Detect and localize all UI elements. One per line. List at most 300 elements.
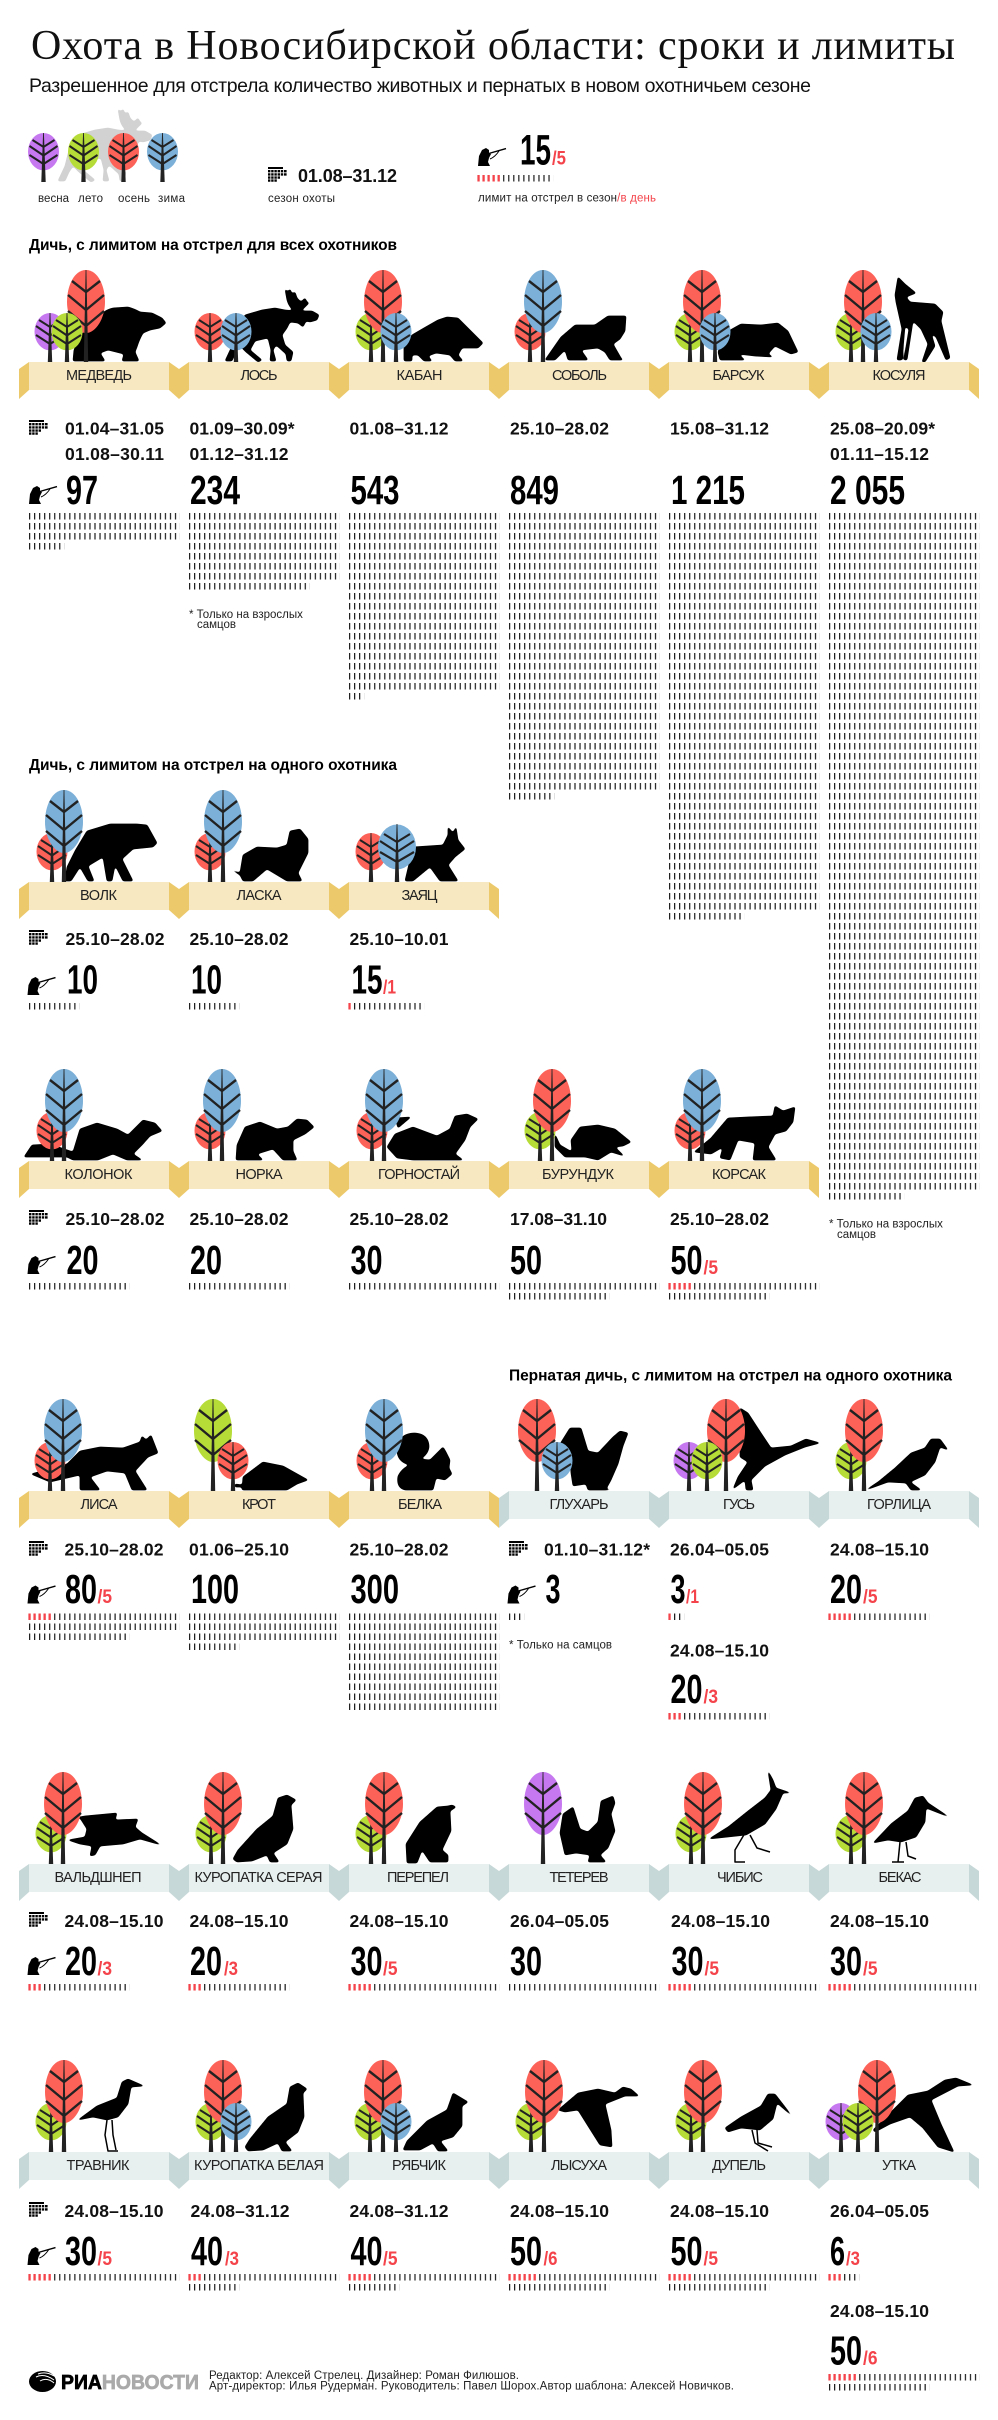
- ribbon: [819, 1864, 979, 1901]
- ribbon: ГЛУХАРЬ: [550, 1497, 608, 1513]
- ribbon: [339, 1491, 499, 1528]
- ribbon: БАРСУК: [712, 368, 765, 384]
- limit: 80: [65, 1566, 97, 1612]
- dates: 24.08–15.10: [64, 2201, 164, 2221]
- limit: 97: [66, 467, 98, 513]
- limit: 234: [190, 467, 240, 513]
- dates: [65, 418, 164, 464]
- legend date: 01.08–31.12: [298, 166, 397, 186]
- dates: 24.08–15.10: [350, 1911, 449, 1931]
- ribbon: [659, 1161, 819, 1198]
- icon: hunter: [28, 2247, 56, 2265]
- icon: mink: [236, 1119, 314, 1160]
- footnote: [189, 609, 303, 631]
- icon: hunter: [508, 1586, 536, 1604]
- ribbon: НОРКА: [236, 1167, 283, 1183]
- icon: calendar: [29, 1541, 48, 1556]
- icon: willow ptarmigan: [245, 2083, 307, 2151]
- panel: Корсак: [659, 1069, 820, 1300]
- legend caption: лимит на отстрел в сезон/в день: [478, 192, 656, 204]
- panel: Норка: [179, 1069, 339, 1290]
- icon: hare: [405, 827, 465, 881]
- ribbon: ЛИСА: [80, 1497, 118, 1513]
- ribbon: ЛАСКА: [236, 888, 282, 904]
- ticks: [349, 1614, 500, 1714]
- limit: 50: [510, 2228, 542, 2274]
- ticks: [508, 2274, 660, 2291]
- logo wordmark: РИАНОВОСТИ: [61, 2372, 199, 2394]
- ticks: [509, 513, 660, 803]
- dates: 25.10–28.02: [350, 1209, 449, 1229]
- legend: seasons: [28, 109, 186, 205]
- ribbon: ПЕРЕПЕЛ: [387, 1870, 449, 1886]
- ribbon: [499, 2152, 659, 2189]
- limit spring: 6: [830, 2228, 845, 2274]
- limit spring: /1: [686, 1587, 699, 1608]
- limit: 15: [352, 956, 382, 1002]
- limit: 30: [510, 1938, 542, 1984]
- limit: 10: [67, 956, 98, 1002]
- trees: [516, 2060, 563, 2152]
- limit autumn: 20: [670, 1666, 702, 1712]
- panel: Рябчик: [339, 2060, 500, 2291]
- dates: 25.10–28.02: [190, 929, 289, 949]
- legend: shot limit: [477, 126, 656, 204]
- limit: 543: [350, 467, 400, 513]
- panel: Травник: [19, 2060, 180, 2281]
- limit: 20: [65, 1938, 97, 1984]
- dates: 24.08–15.10: [830, 1911, 929, 1931]
- panel: Утка: [819, 2060, 980, 2391]
- ribbon: ЧИБИС: [717, 1870, 763, 1886]
- panel: Тетерев: [499, 1772, 660, 1991]
- trees: [356, 824, 416, 882]
- trees: [196, 1772, 242, 1864]
- logo: РИА Новости: [29, 2371, 199, 2394]
- trees: [826, 2060, 896, 2152]
- credits: [209, 2370, 734, 2392]
- ticks: [189, 1003, 239, 1010]
- limit: /5: [98, 2249, 112, 2270]
- ribbon: УТКА: [882, 2158, 916, 2174]
- trees: [194, 313, 252, 362]
- trees: [356, 1069, 403, 1161]
- legend season labels: [38, 193, 186, 205]
- ribbon: КОЛОНОК: [64, 1167, 133, 1183]
- ribbon: [499, 1864, 659, 1901]
- dates: 01.06–25.10: [189, 1540, 289, 1560]
- trees: [836, 1772, 883, 1864]
- icon: woodcock: [63, 1813, 161, 1856]
- legend number: 15: [520, 126, 551, 174]
- trees: [34, 270, 105, 362]
- ribbon: [179, 1161, 339, 1198]
- ribbon: [19, 2152, 179, 2189]
- ticks: [188, 1984, 290, 1991]
- credits: Редактор: Алексей Стрелец. Дизайнер: Роман Филюшов.: [209, 2370, 519, 2382]
- limit: /3: [224, 1959, 238, 1980]
- trees: [836, 270, 892, 362]
- limit: 1 215: [671, 467, 745, 513]
- icon: badger: [718, 323, 798, 360]
- icon: calendar: [509, 1541, 528, 1556]
- icon: coot: [558, 2087, 639, 2147]
- legend ticks: [477, 175, 554, 182]
- panel: Глухарь: [499, 1399, 659, 1652]
- ribbon: ЛЫСУХА: [551, 2158, 607, 2174]
- ticks: [189, 513, 340, 593]
- limit: /5: [704, 2249, 718, 2270]
- limit: /5: [704, 1959, 719, 1980]
- limit: 3: [546, 1566, 560, 1612]
- dates: 25.10–28.02: [66, 929, 165, 949]
- limit: 20: [66, 1237, 98, 1283]
- dates spring: 26.04–05.05: [670, 1540, 769, 1560]
- dates: 01.10–31.12*: [544, 1540, 650, 1560]
- ticks: [29, 513, 180, 553]
- icon: boar: [404, 317, 483, 361]
- dates: 01.11–15.12: [830, 444, 929, 464]
- limit: 30: [830, 1938, 862, 1984]
- panel: Заяц: [339, 824, 499, 1010]
- ticks spring: [828, 2274, 859, 2281]
- dates: 01.08–30.11: [65, 444, 164, 464]
- dates: 01.04–31.05: [65, 418, 164, 438]
- icon: calendar: [29, 1912, 48, 1927]
- dates: 25.10–28.02: [670, 1209, 769, 1229]
- panel: Лиса: [19, 1399, 180, 1640]
- icon: grey moose behind trees: [58, 109, 152, 182]
- ticks: [348, 2274, 500, 2291]
- trees: [196, 2060, 252, 2152]
- panel: Волк: [19, 790, 179, 1010]
- dates: 24.08–15.10: [830, 1540, 929, 1560]
- dates: 01.09–30.09*: [190, 418, 295, 438]
- trees: [676, 1772, 722, 1864]
- icon: goose: [733, 1408, 820, 1490]
- ribbon: [499, 362, 659, 399]
- icon: wolf: [65, 824, 157, 881]
- ticks: [28, 2274, 180, 2281]
- trees: [674, 1399, 745, 1491]
- panel: Колонок: [19, 1069, 179, 1290]
- icon: calendar: [29, 2202, 48, 2217]
- limit: /1: [383, 978, 396, 998]
- trees: [674, 1069, 721, 1161]
- icon: quail: [406, 1805, 456, 1863]
- ribbon: ТРАВНИК: [66, 2158, 130, 2174]
- dates: 25.10–10.01: [350, 929, 449, 949]
- ticks: [29, 1003, 79, 1010]
- ticks: [828, 1984, 980, 1991]
- ribbon: [659, 2152, 819, 2189]
- limit: 2 055: [830, 467, 905, 513]
- limit: 300: [350, 1566, 399, 1612]
- trees: [674, 270, 730, 362]
- limit: 30: [350, 1237, 382, 1283]
- legend number: /5: [552, 148, 566, 170]
- ribbon: [19, 1491, 179, 1528]
- ticks: [509, 1984, 660, 1991]
- trees: [676, 2060, 722, 2152]
- legend: hunting season: [268, 166, 397, 205]
- ticks: [188, 2274, 340, 2291]
- limit: 20: [830, 1566, 862, 1612]
- subtitle: Разрешенное для отстрела количество животных и пернатых в новом охотничьем сезоне: [29, 75, 811, 97]
- dates: 24.08–15.10: [64, 1911, 164, 1931]
- ribbon: БЕКАС: [878, 1870, 922, 1886]
- panel: Бекас: [819, 1772, 980, 1991]
- trees: [194, 1399, 248, 1491]
- trees: [36, 1069, 83, 1161]
- limit: /3: [98, 1959, 112, 1980]
- icon: corsac fox: [694, 1106, 795, 1160]
- icon: calendar: [268, 167, 287, 182]
- legend season labels: зима: [158, 193, 186, 205]
- icon: duck: [873, 2078, 973, 2152]
- icon: black grouse: [560, 1796, 615, 1862]
- panel: Куропатка серая: [179, 1772, 339, 1991]
- icon: kolonok: [24, 1120, 162, 1160]
- panel: Кабан: [339, 270, 500, 703]
- ribbon: [179, 1864, 339, 1901]
- ribbon: РЯБЧИК: [392, 2158, 447, 2174]
- footnote: самцов: [837, 1229, 876, 1241]
- legend season labels: весна: [38, 193, 70, 205]
- trees: [356, 1772, 403, 1864]
- icon: hazel grouse: [403, 2093, 468, 2151]
- limit spring: 3: [670, 1566, 686, 1612]
- ribbon: [179, 882, 339, 919]
- panel: Соболь: [499, 270, 660, 803]
- dates: 15.08–31.12: [670, 418, 769, 438]
- ribbon: КОСУЛЯ: [872, 368, 926, 384]
- icon: hunter: [28, 1256, 56, 1274]
- limit: /5: [98, 1587, 112, 1608]
- ribbon: КРОТ: [242, 1497, 276, 1513]
- ribbon: [819, 362, 979, 399]
- limit spring: /3: [846, 2249, 860, 2270]
- ribbon: [179, 362, 339, 399]
- ticks: [668, 1984, 820, 1991]
- ribbon: ГОРНОСТАЙ: [378, 1165, 460, 1183]
- ticks: [28, 1614, 180, 1640]
- ribbon: ВАЛЬДШНЕП: [54, 1870, 142, 1886]
- icon: calendar: [29, 420, 48, 435]
- limit: /5: [704, 1258, 718, 1279]
- panel: Медведь: [19, 270, 180, 553]
- heading: game with limit per hunter: Дичь, с лимитом на отстрел на одного охотника: [29, 757, 397, 774]
- dates: 24.08–15.10: [671, 1911, 770, 1931]
- ribbon: [339, 882, 499, 919]
- ticks: [348, 1984, 500, 1991]
- panel: Лысуха: [499, 2060, 660, 2291]
- limit: /5: [863, 1959, 878, 1980]
- ribbon: [819, 1491, 979, 1528]
- icon: fox: [31, 1435, 158, 1490]
- ribbon: [19, 1864, 179, 1901]
- ribbon: [339, 1161, 499, 1198]
- limit autumn: /6: [863, 2348, 878, 2370]
- limit: 100: [191, 1566, 239, 1612]
- ticks autumn: [668, 1713, 770, 1720]
- dates autumn: 24.08–15.10: [830, 2301, 929, 2321]
- icon: hunter: [28, 1957, 56, 1975]
- ribbon: [659, 362, 819, 399]
- dates: 25.08–20.09*: [830, 418, 935, 438]
- ticks: [349, 513, 500, 703]
- legend season labels: лето: [78, 193, 103, 205]
- heading: game with limit for all hunters: Дичь, с лимитом на отстрел для всех охотников: [29, 237, 397, 254]
- icon: roe deer: [895, 277, 950, 362]
- panel: Лось: [179, 289, 340, 631]
- legend trees: [28, 133, 178, 182]
- ribbon: [19, 1161, 179, 1198]
- ribbon: БЕЛКА: [398, 1497, 442, 1513]
- icon: lapwing: [709, 1771, 791, 1862]
- limit: /6: [544, 2249, 558, 2270]
- footnote: [829, 1218, 943, 1241]
- icon: turtle dove: [866, 1439, 948, 1490]
- ribbon: [19, 362, 179, 399]
- ribbon: ГОРЛИЦА: [867, 1497, 931, 1513]
- icon: snipe: [873, 1796, 949, 1862]
- icon: globe: [29, 2371, 56, 2392]
- icon: chipmunk: [555, 1125, 631, 1160]
- dates: 01.12–31.12: [190, 444, 289, 464]
- panel: Горностай: [339, 1069, 500, 1290]
- limit: /5: [383, 1959, 398, 1980]
- ribbon: СОБОЛЬ: [552, 368, 607, 384]
- icon: hunter: [29, 486, 57, 504]
- ticks: [509, 1283, 660, 1300]
- legend caption: сезон охоты: [268, 193, 335, 205]
- footnote: * Только на самцов: [509, 1640, 612, 1652]
- panel: Чибис: [659, 1771, 820, 1991]
- limit: 40: [350, 2228, 382, 2274]
- icon: sable: [545, 316, 626, 360]
- limit: 849: [510, 467, 559, 513]
- icon: capercaillie: [560, 1428, 628, 1490]
- ribbon: [499, 1491, 659, 1528]
- ticks: [828, 1614, 930, 1620]
- credits: Арт-директор: Илья Рудерман. Руководитель: Павел Шорох.Автор шаблона: Алексей Новичков.: [209, 2380, 734, 2392]
- dates: 25.10–28.02: [190, 1209, 289, 1229]
- ticks: [668, 1283, 820, 1300]
- trees: [836, 1399, 883, 1491]
- ribbon: ДУПЕЛЬ: [712, 2158, 766, 2174]
- icon: grey partridge: [233, 1795, 296, 1862]
- panel: Бурундук: [499, 1069, 660, 1300]
- limit: 30: [672, 1938, 704, 1984]
- icon: weasel: [225, 829, 308, 881]
- ribbon: [179, 1491, 339, 1528]
- panel: Барсук: [659, 270, 820, 923]
- ribbon: КУРОПАТКА СЕРАЯ: [194, 1870, 322, 1886]
- dates: 01.08–31.12: [350, 418, 449, 438]
- panel: Крот: [179, 1399, 340, 1650]
- ribbon: ЛОСЬ: [240, 368, 278, 384]
- dates autumn: 24.08–15.10: [670, 1640, 769, 1660]
- ticks: [509, 1614, 524, 1620]
- ribbon: ВОЛК: [80, 888, 118, 904]
- limit: /5: [383, 2249, 398, 2270]
- trees: [356, 270, 412, 362]
- ribbon: [339, 362, 499, 399]
- ribbon: [659, 1491, 819, 1528]
- icon: ermine: [387, 1114, 478, 1160]
- trees: [524, 1772, 562, 1864]
- ticks autumn: [828, 2374, 980, 2391]
- dates: 26.04–05.05: [510, 1911, 609, 1931]
- panel: Дупель: [659, 2060, 820, 2291]
- dates: [190, 418, 295, 464]
- legend season labels: осень: [118, 193, 150, 205]
- trees: [36, 790, 83, 882]
- ticks: [189, 1283, 290, 1290]
- dates: 24.08–31.12: [350, 2201, 449, 2221]
- ribbon: [339, 1864, 499, 1901]
- trees: [36, 1772, 82, 1864]
- limit: 30: [65, 2228, 97, 2274]
- icon: hunter: [478, 148, 506, 166]
- limit: /5: [863, 1587, 878, 1608]
- icon: hunter: [28, 977, 56, 995]
- trees: [356, 1399, 403, 1491]
- ribbon: КАБАН: [396, 368, 442, 384]
- dates: 24.08–15.10: [190, 1911, 289, 1931]
- dates: 25.10–28.02: [64, 1540, 164, 1560]
- ticks spring: [668, 1614, 684, 1620]
- icon: great snipe: [725, 2094, 792, 2151]
- footnote: * Только на взрослых: [189, 609, 303, 621]
- icon: mole: [235, 1462, 308, 1490]
- limit: 20: [190, 1938, 222, 1984]
- ticks: [28, 1984, 130, 1991]
- ribbon: [659, 1864, 819, 1901]
- title: Охота в Новосибирской области: сроки и лимиты: [31, 23, 955, 69]
- dates: 17.08–31.10: [510, 1209, 607, 1229]
- ribbon: ТЕТЕРЕВ: [550, 1870, 608, 1886]
- panel: Ласка: [179, 790, 339, 1010]
- ribbon: [819, 2152, 979, 2189]
- ticks: [349, 1283, 500, 1290]
- dates: 25.10–28.02: [350, 1540, 449, 1560]
- trees: [194, 790, 242, 882]
- dates: 24.08–31.12: [190, 2201, 290, 2221]
- trees: [34, 1399, 82, 1491]
- limit: 50: [670, 1237, 702, 1283]
- ticks: [668, 2274, 820, 2291]
- ribbon: КОРСАК: [712, 1167, 767, 1183]
- ticks: [189, 1614, 340, 1650]
- limit: 10: [191, 956, 222, 1002]
- ticks: [829, 513, 980, 1203]
- heading: feathered game: Пернатая дичь, с лимитом на отстрел на одного охотника: [509, 1368, 952, 1384]
- ticks: [669, 513, 820, 923]
- dates: 25.10–28.02: [510, 418, 609, 438]
- dates spring: 26.04–05.05: [830, 2201, 929, 2221]
- limit: 20: [190, 1237, 222, 1283]
- ticks: [348, 1003, 424, 1010]
- ribbon: [499, 1161, 659, 1198]
- panel: Гусь: [659, 1399, 820, 1720]
- trees: [518, 1399, 572, 1491]
- ribbon: ГУСЬ: [723, 1497, 755, 1513]
- icon: calendar: [29, 1210, 48, 1225]
- dates: 24.08–15.10: [670, 2201, 769, 2221]
- footnote: * Только на взрослых: [829, 1218, 943, 1230]
